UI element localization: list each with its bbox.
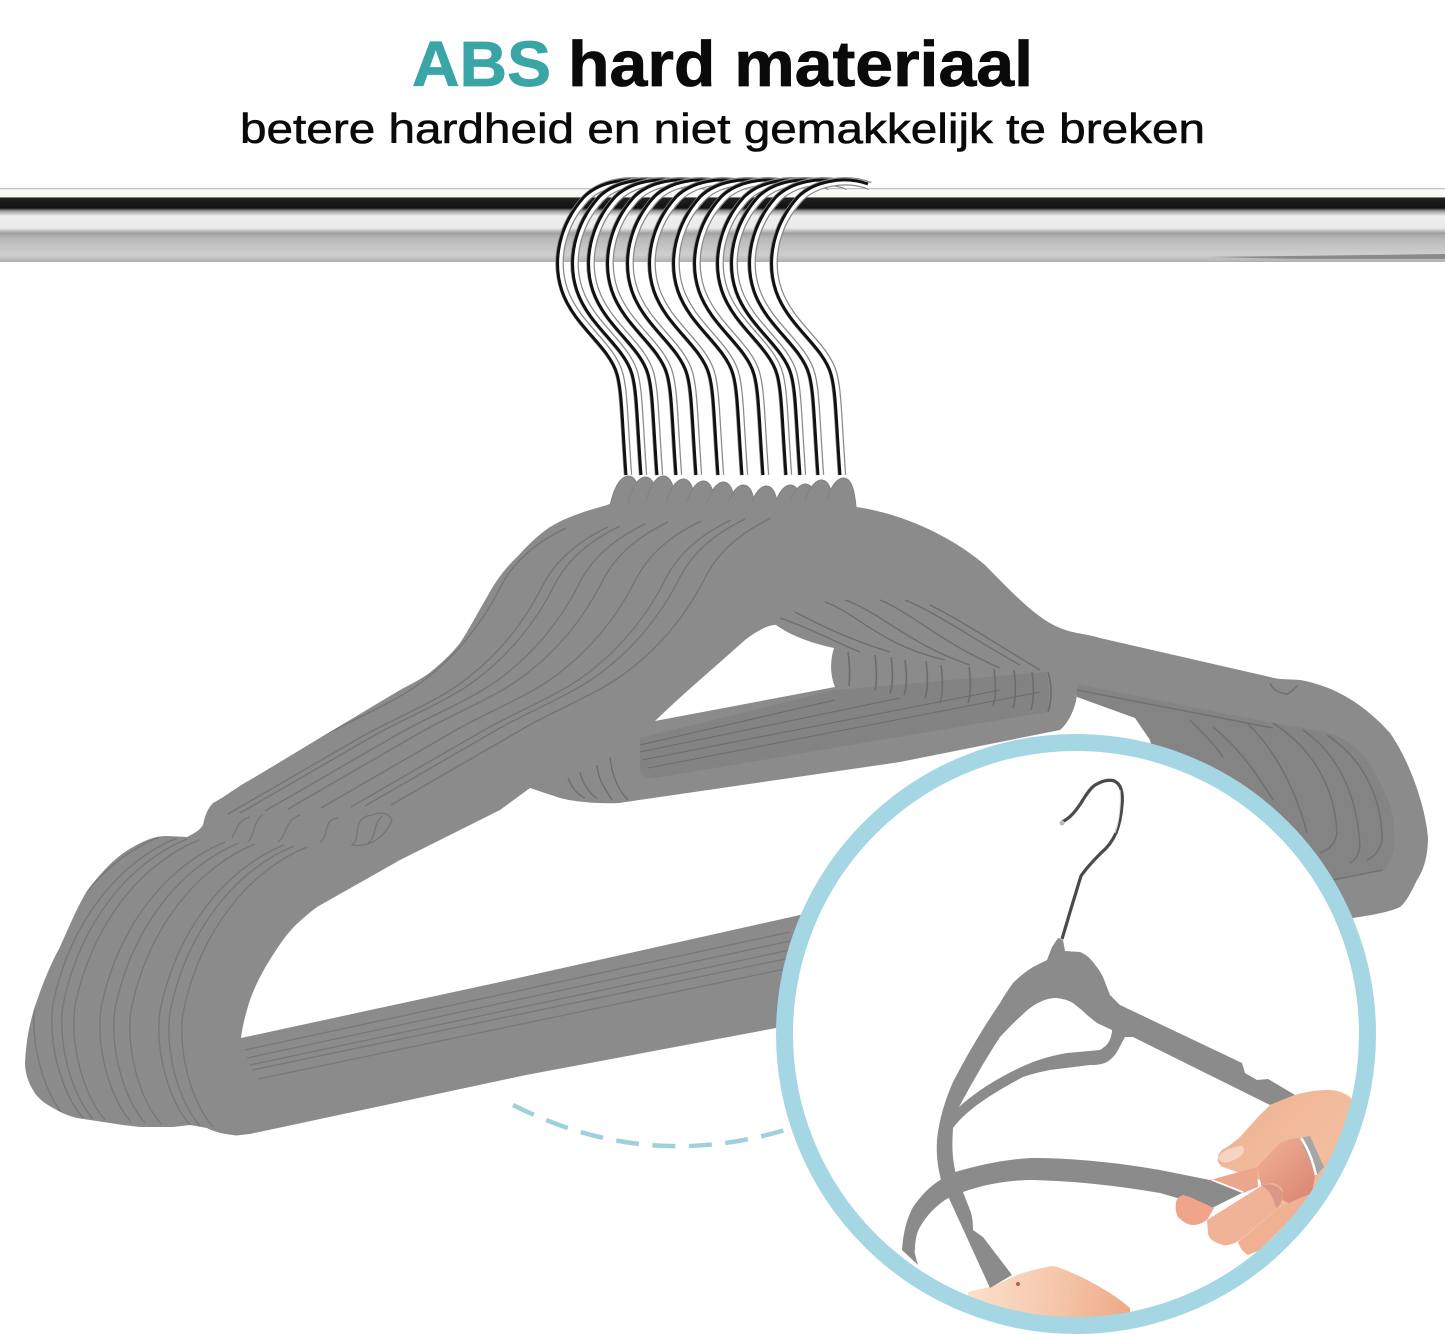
title: ABS <box>412 28 551 100</box>
bottom finger <box>1238 1194 1309 1255</box>
palm <box>1257 1138 1315 1204</box>
neck bumps <box>608 476 857 525</box>
subtitle: betere hardheid en niet gemakkelijk te breken <box>240 105 1205 152</box>
circle ring <box>784 742 1368 1326</box>
hanger silhouette <box>25 500 1428 1135</box>
hand back and thumb <box>1218 1090 1352 1206</box>
fingernail <box>1218 1146 1244 1163</box>
back hangers seen through the opening <box>568 600 1040 800</box>
left lobe edges <box>34 837 307 1127</box>
right lobe edges <box>1077 683 1383 880</box>
arm notches <box>232 813 392 846</box>
bar glint <box>1212 1180 1243 1192</box>
middle finger <box>1210 1167 1258 1193</box>
flexed hanger body <box>937 938 1295 1288</box>
layered edges clipped to the silhouette <box>34 518 771 1127</box>
upper bar recessed panel <box>640 672 1049 778</box>
circle background <box>784 742 1368 1326</box>
forearm at the bottom <box>968 1266 1130 1317</box>
silver band <box>1300 1136 1324 1176</box>
small hook <box>1060 780 1122 939</box>
hand <box>1176 1090 1352 1255</box>
knuckle <box>1262 1184 1283 1208</box>
triangular opening <box>655 625 835 721</box>
upper bar notches <box>640 652 1051 768</box>
curved bottom bar <box>902 1158 1242 1265</box>
lower left fingertip <box>1176 1195 1214 1225</box>
magnified circle inset <box>784 742 1368 1334</box>
metal hooks <box>558 180 870 475</box>
inset contents <box>902 780 1352 1334</box>
main finger <box>1207 1183 1283 1245</box>
lower bar grooves <box>245 932 790 1079</box>
shoulder edges <box>186 518 771 815</box>
chrome clothes rail <box>0 188 1445 262</box>
title: hard materiaal <box>568 28 1033 100</box>
right lobe recess <box>1077 684 1394 950</box>
dashed connector arc <box>513 1105 785 1146</box>
stack of grey hangers <box>25 476 1428 1135</box>
